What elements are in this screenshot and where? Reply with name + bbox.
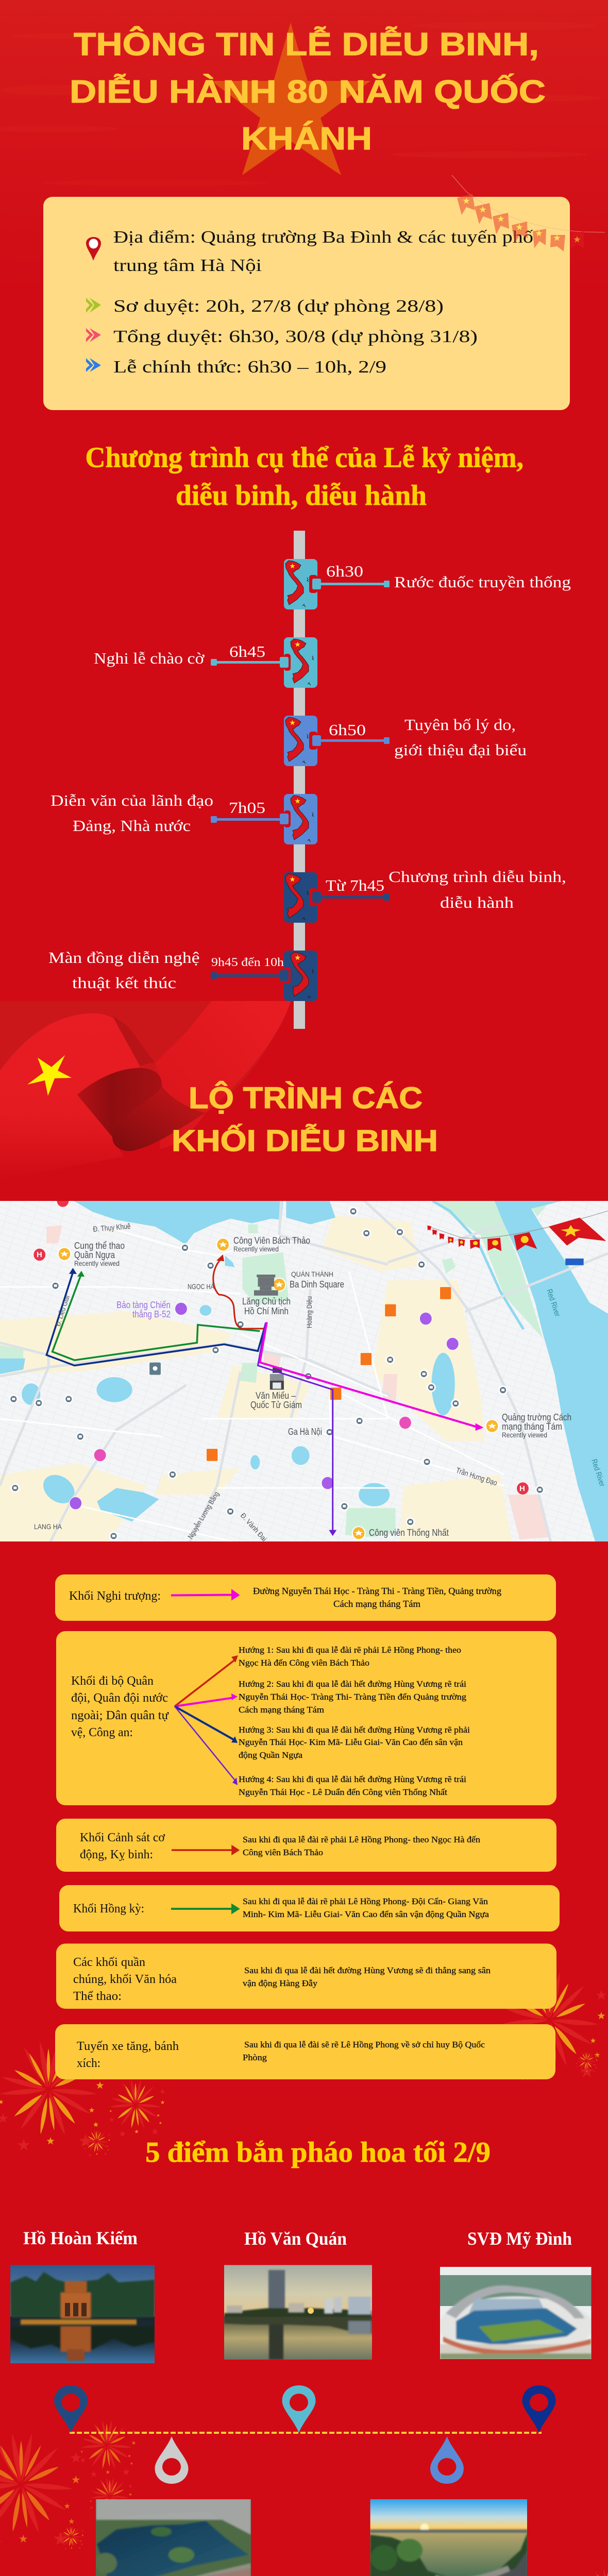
- step 6: 9h45 đến 10h: Màn đồng diễn nghệ: [48, 948, 200, 967]
- top texture background: [0, 0, 608, 289]
- heading: ceremony programme: [86, 442, 523, 512]
- timeline: [48, 531, 571, 1029]
- map labels: Ba Dinh Square: [290, 1279, 344, 1290]
- map labels: Công viên Thống Nhất: [369, 1528, 449, 1538]
- firework: left medium: [109, 2079, 165, 2137]
- step 4: 7h05: Đảng, Nhà nước: [73, 817, 191, 835]
- map labels: Recently viewed: [233, 1245, 279, 1253]
- panel: Khối Cảnh sát cơ động: Sau khi đi qua lễ đài rẽ phải Lê Hồng Phong- theo Ngọc Hà đến: [243, 1835, 481, 1844]
- step 6: 9h45 đến 10h: 9h45 đến 10h: [211, 956, 284, 969]
- direction texts: Nguyễn Thái Học - Lê Duẩn đến Công viên Thống Nhất: [239, 1787, 447, 1797]
- route description: [253, 1586, 501, 1609]
- icon: yellow star on flag: [27, 1055, 72, 1096]
- map labels: H: [519, 1484, 525, 1493]
- firework: right of boxes: [499, 1972, 606, 2081]
- step 4: 7h05: 7h05: [229, 799, 265, 817]
- arrow: magenta: [171, 1591, 238, 1599]
- panel: Các khối quần chúng: chúng, khối Văn hóa: [73, 1973, 177, 1986]
- map labels: QUÁN THÁNH: [291, 1270, 333, 1278]
- left label: ngoài; Dân quân tự: [71, 1709, 169, 1722]
- icon: mausoleum: [254, 1275, 278, 1296]
- step 2: 6h45: 6h45: [229, 642, 265, 660]
- step 5: Từ 7h45: Từ 7h45: [326, 876, 384, 894]
- map labels: thắng B-52: [132, 1309, 171, 1319]
- panel: Tuyến xe tăng, bánh xích: xích:: [77, 2057, 100, 2070]
- map labels: Nguyễn Lương Bằng: [186, 1490, 221, 1540]
- official ceremony text: Lễ chính thức: 6h30 – 10h, 2/9: [113, 358, 386, 377]
- pin: Hồ Hoàn Kiếm: [54, 2385, 88, 2433]
- heading: parade routes: [172, 1081, 438, 1158]
- panel: Khối Hồng kỳ: Sau khi đi qua lễ đài rẽ phải Lê Hồng Phong- Đội Cấn- Giang Văn: [243, 1896, 488, 1906]
- map labels: Văn Miếu –: [256, 1391, 296, 1401]
- location line: [70, 2432, 542, 2434]
- pin: Công viên Thống Nhất: [155, 2436, 189, 2484]
- map water: [0, 1201, 608, 1541]
- direction texts: động Quần Ngựa: [239, 1750, 302, 1760]
- ribbon flag: [0, 1001, 291, 1180]
- panel: Khối Hồng kỳ: Minh- Kim Mã- Liễu Giai- Văn Cao đến sân vận động Quần Ngựa: [243, 1909, 489, 1919]
- location text: trung tâm Hà Nội: [113, 256, 262, 275]
- map labels: Đ. Thụy Khuê: [93, 1222, 131, 1234]
- panel: Khối Hồng kỳ: [59, 1885, 560, 1931]
- map labels: H: [37, 1250, 42, 1259]
- photo: Công viên Thống Nhất: [94, 2499, 251, 2576]
- title: THÔNG TIN LỄ DIỄU BINH,: [74, 27, 539, 62]
- pin: Hồ Tây: [430, 2436, 464, 2484]
- step 4: 7h05: Diễn văn của lãnh đạo: [50, 791, 213, 809]
- step 1: 6h30: Rước đuốc truyền thống: [394, 573, 571, 591]
- step 6: 9h45 đến 10h: [48, 948, 317, 1001]
- timeline bar: [294, 531, 305, 1029]
- panel: Tuyến xe tăng, bánh xích: Sau khi đi qua lễ đài sẽ rẽ Lê Hồng Phong về sở chỉ huy Bộ Quốc: [244, 2040, 485, 2049]
- firework: left large: [0, 2041, 105, 2150]
- panel: Khối Cảnh sát cơ động: [56, 1819, 556, 1872]
- direction texts: Hướng 2: Sau khi đi qua lễ đài hết đường Hùng Vương rẽ trái: [239, 1679, 466, 1689]
- step 3: 6h50: [284, 716, 527, 766]
- map areas: [0, 1201, 608, 1541]
- step 5: Từ 7h45: Chương trình diễu binh,: [389, 868, 566, 886]
- map labels: Đ. Vành Đai: [239, 1511, 268, 1543]
- panel: Khối Nghi trượng: [55, 1574, 556, 1621]
- step 3: 6h50: 6h50: [329, 721, 366, 739]
- panel: Tuyến xe tăng, bánh xích: [55, 2024, 555, 2079]
- photo: Hồ Văn Quán: [224, 2265, 372, 2360]
- map labels: Hoàng Diệu: [305, 1296, 313, 1328]
- bunting top right: [452, 175, 605, 251]
- panel: Tuyến xe tăng, bánh xích: Phòng: [243, 2053, 267, 2062]
- arrow: green: [171, 1905, 238, 1912]
- full rehearsal text: Tổng duyệt: 6h30, 30/8 (dự phòng 31/8): [113, 327, 478, 346]
- map labels: Trần Hưng Đạo: [455, 1466, 498, 1487]
- panel: Các khối quần chúng: [56, 1943, 556, 2009]
- panel: Các khối quần chúng: Sau khi đi qua lễ đài hết đường Hùng Vương sẽ đi thẳng sang sân: [244, 1965, 491, 1975]
- step 4: 7h05: [50, 791, 317, 844]
- photo: Hồ Tây: [368, 2499, 528, 2576]
- map labels: NGỌC HÀ: [188, 1282, 215, 1291]
- map of routes: [0, 1195, 608, 1543]
- map labels: Lăng Chủ tịch: [242, 1296, 291, 1307]
- label: Hồ Hoàn Kiếm: Hồ Hoàn Kiếm: [23, 2228, 138, 2248]
- map labels: LANG HA: [34, 1522, 62, 1531]
- step 2: 6h45: Nghi lễ chào cờ: [94, 649, 205, 667]
- map labels: mạng tháng Tám: [502, 1421, 562, 1432]
- left label: Khối đi bộ Quân: [71, 1674, 154, 1688]
- map labels: Ga Hà Nội: [288, 1427, 322, 1437]
- pin: Hồ Văn Quán: [282, 2385, 315, 2433]
- map roads: [0, 1201, 608, 1541]
- panel: Khối Nghi trượng: Khối Nghi trượng:: [69, 1589, 161, 1603]
- location text: [113, 228, 533, 275]
- panel: Khối Cảnh sát cơ động: Công viên Bách Thảo: [243, 1848, 323, 1857]
- map labels: Quần Ngựa: [74, 1250, 115, 1260]
- left label: đội, Quân đội nước: [71, 1691, 168, 1705]
- panel: Khối Cảnh sát cơ động: Khối Cảnh sát cơ: [80, 1831, 165, 1844]
- panel: Các khối quần chúng: Thể thao:: [73, 1990, 122, 2003]
- direction texts: Ngọc Hà đến Công viên Bách Thảo: [239, 1658, 369, 1668]
- step 1: 6h30: [284, 559, 571, 609]
- map labels: Red River: [589, 1458, 606, 1488]
- map labels: Cung thể thao: [74, 1241, 125, 1251]
- pin: SVĐ Mỹ Đình: [522, 2385, 555, 2433]
- firework: mid left top: [80, 2420, 137, 2477]
- heading: parade routes: KHỐI DIỄU BINH: [172, 1124, 438, 1158]
- map labels: Red River: [545, 1288, 562, 1318]
- big star behind the title: [211, 23, 370, 175]
- route description: Cách mạng tháng Tám: [333, 1599, 420, 1609]
- icon: temple of literature: [270, 1367, 284, 1389]
- branching arrows: [175, 1655, 238, 1785]
- step 5: Từ 7h45: diễu hành: [440, 893, 514, 911]
- map pins: [9, 1195, 584, 1540]
- map labels: Quảng trường Cách: [502, 1412, 571, 1422]
- direction texts: Nguyễn Thái Học- Kim Mã- Liễu Giai- Văn Cao đến sân vận: [239, 1737, 463, 1747]
- map labels: Bảo tàng Chiến: [116, 1300, 171, 1310]
- map labels: Quốc Tử Giám: [250, 1400, 302, 1410]
- arrow: red: [172, 1846, 238, 1854]
- label: SVĐ Mỹ Đình: SVĐ Mỹ Đình: [467, 2228, 572, 2249]
- step 3: 6h50: giới thiệu đại biểu: [394, 741, 527, 759]
- photo: Hồ Hoàn Kiếm: [10, 2265, 155, 2364]
- step 1: 6h30: 6h30: [326, 562, 363, 580]
- route lines: [46, 1259, 478, 1532]
- firework: mid left orange large: [0, 2433, 81, 2549]
- map labels: Hồ Chí Minh: [244, 1306, 289, 1316]
- firework: left small: [84, 2129, 110, 2157]
- map labels: [34, 1222, 606, 1543]
- map labels: Công Viên Bách Thảo: [233, 1235, 310, 1246]
- panel: Các khối quần chúng: Các khối quần: [73, 1956, 145, 1969]
- left label: vệ, Công an:: [71, 1726, 133, 1739]
- direction texts: Hướng 1: Sau khi đi qua lễ đài rẽ phải Lê Hồng Phong- theo: [239, 1645, 461, 1655]
- firework: mid left tiny: [60, 2526, 84, 2550]
- location text: Địa điểm: Quảng trường Ba Đình & các tuyến phố: [113, 228, 533, 247]
- icon: location pin: [86, 237, 101, 261]
- map labels: Đ. Liễu Giai: [54, 1294, 71, 1327]
- label: Hồ Văn Quán: Hồ Văn Quán: [244, 2228, 347, 2249]
- direction texts: Nguyễn Thái Học- Tràng Thi- Tràng Tiền đến Quảng trường: [239, 1692, 467, 1702]
- panel: Khối Hồng kỳ: Khối Hồng kỳ:: [73, 1902, 144, 1916]
- map labels: Recently viewed: [74, 1259, 120, 1267]
- panel: Khối Cảnh sát cơ động: động, Kỵ binh:: [80, 1848, 153, 1861]
- panel: Các khối quần chúng: vận động Hàng Đẫy: [243, 1978, 318, 1988]
- firework: bottom right top: [582, 2569, 608, 2576]
- firework: mid left lower: [90, 2477, 132, 2520]
- direction texts: Hướng 3: Sau khi đi qua lễ đài hết đường Hùng Vương rẽ phải: [239, 1725, 470, 1735]
- step 6: 9h45 đến 10h: thuật kết thúc: [72, 974, 176, 992]
- panel: schedule info: [43, 197, 570, 410]
- direction texts: Cách mạng tháng Tám: [239, 1705, 324, 1715]
- title: KHÁNH: [241, 121, 372, 157]
- map labels: Recently viewed: [502, 1431, 547, 1439]
- heading: ceremony programme: diễu binh, diễu hành: [176, 480, 427, 512]
- heading: fireworks: 5 điểm bắn pháo hoa tối 2/9: [145, 2137, 491, 2168]
- left label: [71, 1674, 169, 1739]
- icon: green chevrons: [86, 298, 101, 313]
- step 5: Từ 7h45: [284, 868, 566, 923]
- firework: right small: [576, 2051, 598, 2073]
- bunting on map: [427, 1211, 608, 1251]
- title: DIỄU HÀNH 80 NĂM QUỐC: [70, 74, 546, 110]
- route arrowheads: [69, 1255, 483, 1536]
- direction texts: [239, 1645, 470, 1797]
- panel: Tuyến xe tăng, bánh xích: Tuyến xe tăng, bánh: [77, 2040, 179, 2053]
- direction texts: Hướng 4: Sau khi đi qua lễ đài hết đường Hùng Vương rẽ trái: [239, 1774, 466, 1784]
- photo: SVĐ Mỹ Đình: [438, 2267, 593, 2360]
- icon: pink chevrons: [86, 328, 101, 342]
- heading: parade routes: LỘ TRÌNH CÁC: [189, 1081, 423, 1115]
- step 2: 6h45: [94, 637, 317, 688]
- route description: Đường Nguyễn Thái Học - Tràng Thi - Tràng Tiền, Quảng trường: [253, 1586, 501, 1596]
- heading: ceremony programme: Chương trình cụ thể của Lễ kỷ niệm,: [86, 442, 523, 474]
- icon: blue chevrons: [86, 358, 101, 372]
- rehearsal text: Sơ duyệt: 20h, 27/8 (dự phòng 28/8): [113, 297, 444, 316]
- title: [70, 27, 546, 157]
- panel: Khối đi bộ: [56, 1631, 556, 1805]
- step 3: 6h50: Tuyên bố lý do,: [404, 716, 516, 734]
